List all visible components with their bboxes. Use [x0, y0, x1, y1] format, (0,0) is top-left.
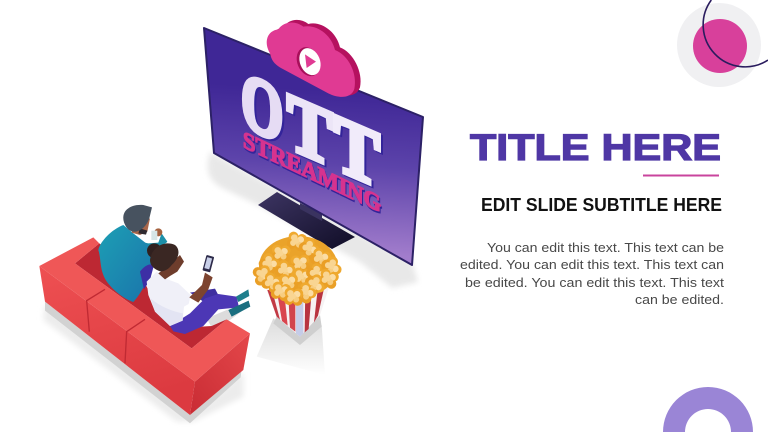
- tv stand: [258, 192, 355, 249]
- title: TITLE HERE: [470, 126, 721, 168]
- man: [98, 205, 167, 302]
- floor patch under feet: [207, 305, 250, 327]
- tv screen text: OTT: T: [289, 78, 335, 186]
- title underline: [643, 174, 719, 176]
- tv screen: [204, 28, 423, 265]
- icon: cloud with play button: [267, 20, 361, 97]
- sofa seams: [87, 289, 145, 363]
- sofa back and arms top: [39, 237, 250, 382]
- body text: be edited. You can edit this text. This text: [465, 275, 724, 290]
- subtitle: EDIT SLIDE SUBTITLE HERE: [481, 195, 722, 215]
- tv screen text: OTT: [241, 55, 382, 207]
- popcorn kernels: [252, 230, 343, 307]
- body text: edited. You can edit this text. This text can: [460, 257, 724, 272]
- illustration: popcorn bucket: [252, 230, 343, 375]
- popcorn shadow: [257, 318, 325, 375]
- body text: [460, 240, 724, 307]
- tv floor shadow: [208, 152, 418, 288]
- tv screen text: STREAMING: STREAMING: [243, 126, 381, 218]
- sofa: [39, 237, 250, 423]
- sofa shadow strip: [45, 302, 242, 423]
- sofa seat: [75, 243, 227, 348]
- tv screen text: OTT: O: [241, 55, 283, 161]
- body text: You can edit this text. This text can be: [487, 240, 724, 255]
- tv screen text: OTT: O: [243, 57, 285, 163]
- tv screen text: OTT: T: [287, 76, 333, 184]
- decorative half ring: bottom right: [663, 387, 753, 432]
- woman: [147, 243, 250, 334]
- bucket base: [273, 315, 322, 345]
- sofa right face: [190, 333, 250, 415]
- sofa left face: [39, 266, 195, 415]
- illustration: sofa with couple: [39, 205, 250, 423]
- tv screen text: OTT: T: [334, 97, 380, 205]
- bucket: [266, 284, 330, 337]
- body text: can be edited.: [635, 292, 724, 307]
- illustration: television: [204, 20, 423, 288]
- decorative circles: top right: [677, 0, 768, 87]
- tv screen text: OTT: T: [336, 99, 382, 207]
- tv screen text: STREAMING: STREAMING: [244, 128, 382, 220]
- sofa floor shadow: [43, 303, 243, 422]
